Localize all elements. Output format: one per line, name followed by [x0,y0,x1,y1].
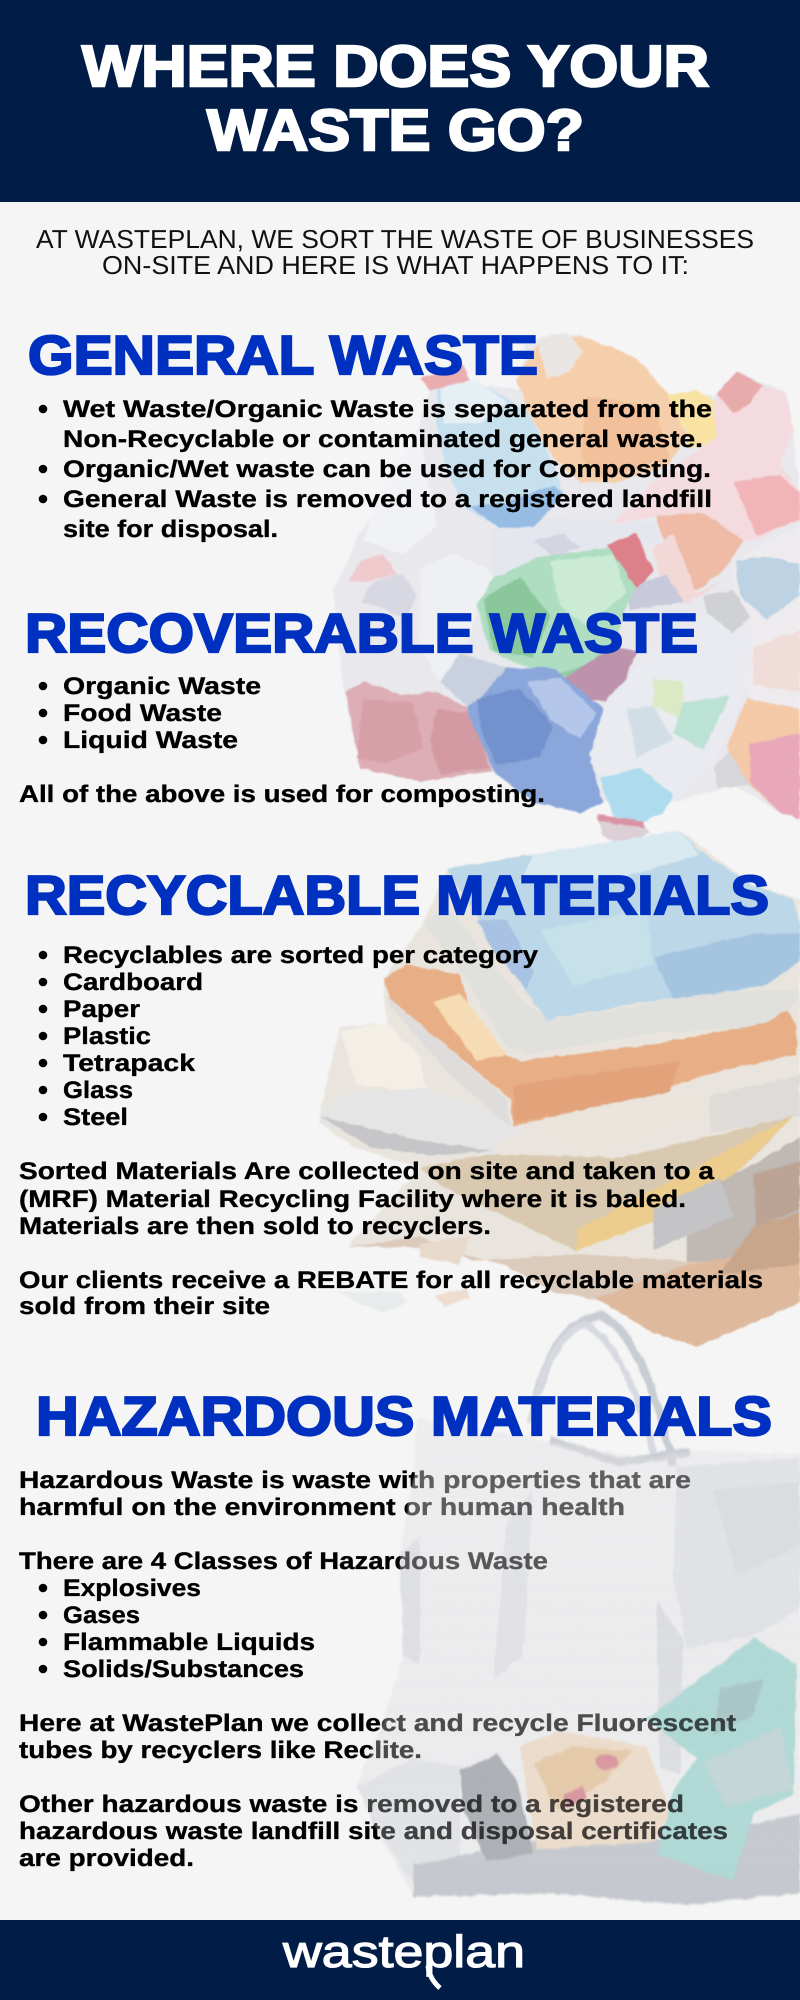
text: fluorescent tube recycling: tubes by recyclers like Reclite. [19,1737,422,1764]
heading: recoverable waste: RECOVERABLE WASTE [25,602,698,664]
illustration: stack of paper and cardboard [320,830,800,1347]
list: recyclable materials: Paper [63,996,140,1023]
list: recoverable waste: Food Waste [63,700,222,727]
illustration: translucent plastic bag wash over the text [357,1316,800,1905]
list: hazardous classes: Solids/Substances [63,1656,304,1683]
text: fluorescent tube recycling: Here at WastePlan we collect and recycle Fluorescent [19,1710,736,1737]
list: recyclable materials [39,942,539,1131]
text: hazardous waste definition [19,1467,691,1521]
list: recoverable waste [39,673,261,754]
text: hazardous disposal: are provided. [19,1845,194,1872]
list: general waste: General Waste is removed to a registered landfill [63,486,712,513]
list: hazardous classes: Gases [63,1602,140,1629]
title [82,34,709,163]
list: general waste: Wet Waste/Organic Waste is separated from the [63,396,712,423]
list: general waste [39,396,712,543]
list: recoverable waste: Liquid Waste [63,727,238,754]
intro text: AT WASTEPLAN, WE SORT THE WASTE OF BUSINESSES [36,224,754,254]
logo: wasteplan: wasteplan [282,1926,525,1977]
title: WASTE GO? [207,98,584,163]
illustration: pile of plastic bottles [333,332,800,847]
text: recycling process: (MRF) Material Recycling Facility where it is baled. [19,1186,686,1213]
list: recoverable waste: Organic Waste [63,673,261,700]
text: hazardous disposal: hazardous waste landfill site and disposal certificates [19,1818,728,1845]
text: recycling process: Materials are then sold to recyclers. [19,1213,491,1240]
heading: recyclable materials: RECYCLABLE MATERIALS [25,864,769,926]
text: recycling process [19,1158,715,1240]
text: rebate note: sold from their site [19,1293,270,1320]
list: hazardous classes: Flammable Liquids [63,1629,315,1656]
title: WHERE DOES YOUR [82,34,709,99]
intro text [36,224,754,280]
list: recyclable materials: Recyclables are sorted per category [63,942,539,969]
illustration: bag folds and contents [357,1419,800,1905]
text: hazardous waste definition: Hazardous Waste is waste with properties that are [19,1467,691,1494]
list: recyclable materials: Cardboard [63,969,203,996]
footer banner [0,1920,800,2000]
list: general waste: site for disposal. [63,516,278,543]
list: general waste: Organic/Wet waste can be used for Composting. [63,456,711,483]
text: fluorescent tube recycling [19,1710,736,1764]
text: hazardous disposal: Other hazardous waste is removed to a registered [19,1791,684,1818]
text: hazardous waste definition: harmful on the environment or human health [19,1494,625,1521]
text: rebate note: Our clients receive a REBATE for all recyclable materials [19,1267,763,1294]
list: recyclable materials: Glass [63,1077,133,1104]
text: composting note: All of the above is used for composting. [19,781,545,808]
heading: general waste: GENERAL WASTE [28,324,538,386]
logo: wasteplan [282,1926,525,1988]
heading: hazardous materials: HAZARDOUS MATERIALS [36,1385,772,1447]
list: general waste: Non-Recyclable or contaminated general waste. [63,426,703,453]
intro text: ON-SITE AND HERE IS WHAT HAPPENS TO IT: [102,250,689,280]
text: rebate note [19,1267,763,1320]
text: hazardous classes intro: There are 4 Classes of Hazardous Waste [19,1548,548,1575]
list: recyclable materials: Steel [63,1104,128,1131]
list: hazardous classes: Explosives [63,1575,201,1602]
list: recyclable materials: Plastic [63,1023,151,1050]
text: hazardous disposal [19,1791,728,1872]
text: recycling process: Sorted Materials Are collected on site and taken to a [19,1158,715,1185]
title banner [0,0,800,202]
list: recyclable materials: Tetrapack [63,1050,196,1077]
list: hazardous classes [39,1575,315,1683]
